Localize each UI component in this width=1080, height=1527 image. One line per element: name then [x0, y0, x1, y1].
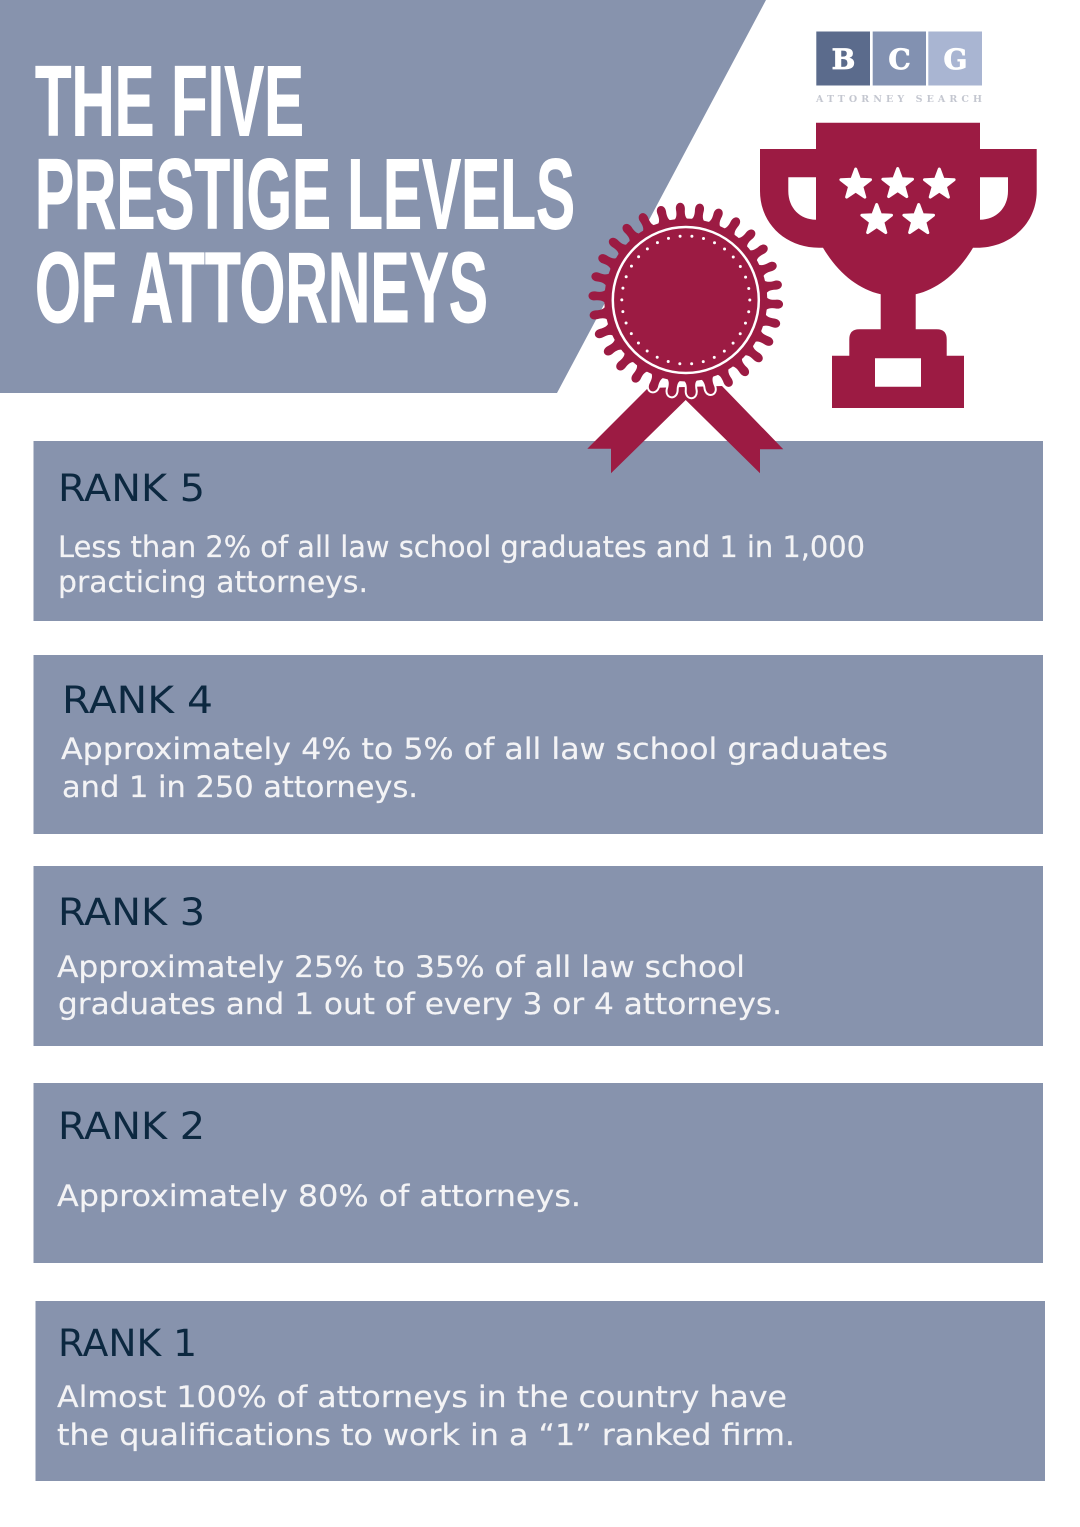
- panel: rank 2: [34, 1083, 1043, 1263]
- heading: rank 4: RANK 4: [62, 679, 213, 722]
- panel: rank 3: [34, 866, 1043, 1046]
- text: rank 3 description: [57, 950, 782, 1021]
- logo tagline: ATTORNEY SEARCH: [815, 94, 982, 105]
- panel: rank 5: [34, 441, 1043, 621]
- logo square B: B: [832, 43, 855, 76]
- text: rank 5 description: Less than 2% of all law school graduates and 1 in 1,000: [58, 530, 865, 564]
- rosette seal: [588, 202, 784, 398]
- text: rank 4 description: and 1 in 250 attorneys.: [62, 770, 418, 804]
- text: rank 5 description: [58, 530, 865, 599]
- logo square C: C: [888, 43, 911, 76]
- title: THE FIVE: [35, 46, 304, 158]
- text: rank 1 description: [57, 1380, 795, 1452]
- text: rank 4 description: [61, 732, 888, 804]
- logo square C: [873, 32, 926, 86]
- title: [35, 46, 575, 344]
- panel: rank 1: [36, 1301, 1045, 1481]
- title: PRESTIGE LEVELS: [35, 138, 575, 250]
- text: rank 3 description: Approximately 25% to 35% of all law school: [57, 950, 745, 984]
- icon: trophy with five stars: [760, 123, 1037, 408]
- logo square G: G: [944, 43, 967, 76]
- text: rank 3 description: graduates and 1 out of every 3 or 4 attorneys.: [58, 987, 782, 1021]
- ribbons: [587, 386, 783, 473]
- text: rank 4 description: Approximately 4% to 5% of all law school graduates: [61, 732, 888, 766]
- logo: BCG Attorney Search: [815, 32, 982, 105]
- stars: [841, 168, 954, 233]
- heading: rank 5: RANK 5: [58, 467, 205, 510]
- text: rank 2 description: Approximately 80% of attorneys.: [57, 1179, 581, 1213]
- title: OF ATTORNEYS: [35, 232, 488, 344]
- text: rank 1 description: the qualifications to work in a “1” ranked firm.: [57, 1418, 795, 1452]
- heading: rank 1: RANK 1: [58, 1322, 197, 1365]
- header banner: [0, 0, 766, 393]
- logo square G: [928, 32, 982, 86]
- icon: award rosette with ribbons: [587, 202, 784, 473]
- panel: rank 4: [34, 655, 1043, 834]
- text: rank 1 description: Almost 100% of attorneys in the country have: [57, 1380, 787, 1414]
- logo square B: [816, 32, 870, 86]
- heading: rank 2: RANK 2: [58, 1105, 205, 1148]
- heading: rank 3: RANK 3: [58, 891, 205, 934]
- text: rank 5 description: practicing attorneys.: [58, 565, 368, 599]
